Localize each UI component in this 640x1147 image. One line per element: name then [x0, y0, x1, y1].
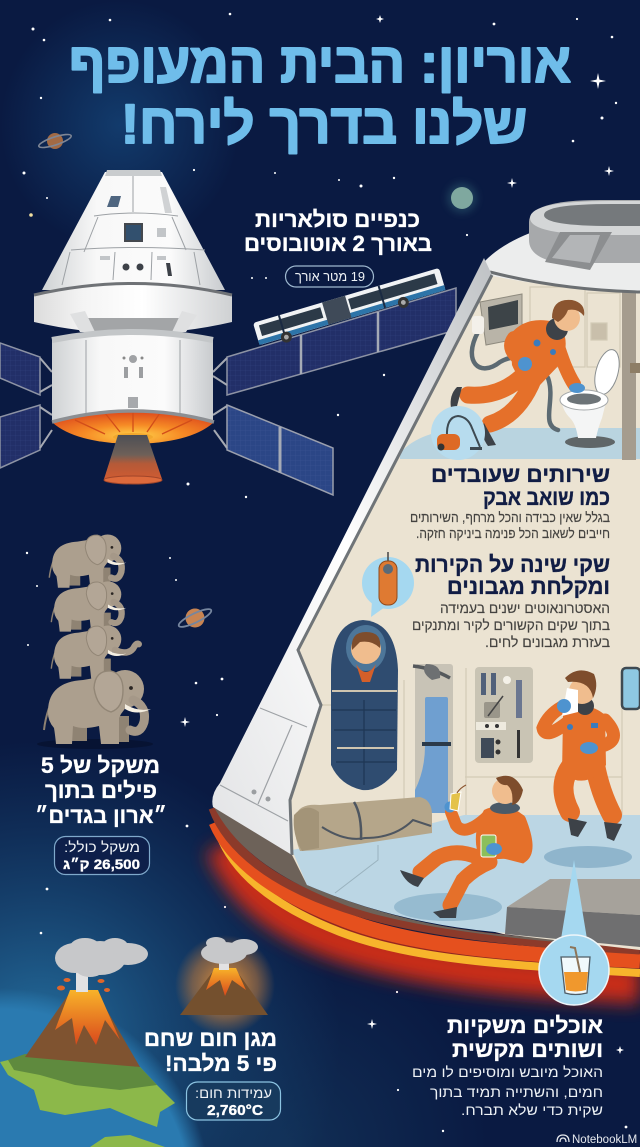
volcano: erupting on earth — [25, 938, 148, 1067]
toilet body text — [410, 510, 610, 541]
rolled cargo bag — [294, 797, 432, 851]
planet: ringed brown — [38, 132, 72, 150]
toilet heading: שירותים שעובדים — [431, 462, 610, 487]
sleeping body text — [412, 600, 610, 650]
juice cup — [450, 792, 461, 811]
drink body text: האוכל מיובש ומוסיפים לו מים — [412, 1064, 603, 1080]
drink heading: אוכלים משקיות — [447, 1013, 603, 1038]
astronaut drinking — [394, 776, 527, 921]
heat shield heading: פי 5 מלבה! — [165, 1051, 277, 1076]
planet: green — [447, 183, 477, 213]
toilet body text: בגלל שאין כבידה והכל מרחף, השירותים — [410, 510, 610, 525]
arms — [543, 707, 614, 748]
pill: total weight: משקל כולל: — [64, 839, 140, 855]
title: אוריון: הבית המעופף — [69, 31, 571, 94]
head — [576, 697, 594, 715]
legs — [420, 853, 490, 905]
torso — [562, 706, 606, 781]
torso — [510, 320, 566, 385]
right upper wing — [227, 288, 456, 395]
legs — [563, 765, 612, 815]
solar wings heading: כנפיים סולאריות — [255, 207, 420, 232]
sleeping heading — [415, 552, 610, 599]
third elephant, trunk raised — [51, 625, 139, 679]
sleeping body text: בתוך שקים הקשורים לקיר ומתנקים — [412, 617, 610, 633]
arms — [511, 338, 574, 384]
collar and head — [490, 802, 520, 814]
toilet body text: חייבים לשאוב הכל פנימה ביניקה חזקה. — [416, 526, 610, 541]
docking ring — [529, 200, 640, 270]
sleeping heading: שקי שינה על הקירות — [415, 552, 610, 577]
second elephant — [51, 581, 126, 632]
nozzle — [113, 433, 153, 441]
smoke cloud — [55, 938, 148, 992]
bus on solar wing — [253, 268, 447, 350]
astronaut with vacuum hose at toilet — [451, 294, 624, 448]
window — [622, 668, 640, 709]
right lower wing — [227, 405, 333, 495]
upper room walls — [310, 287, 622, 820]
icon bubble: hanging sleeping bag — [362, 552, 414, 617]
head — [546, 300, 584, 340]
pill: 19 m length: 19 מטר אורך — [295, 269, 365, 284]
solar wings heading: באורך 2 אוטובוסים — [244, 231, 432, 256]
top elephant — [49, 534, 126, 588]
pill: heat resistance — [186, 1082, 280, 1120]
wall — [290, 275, 640, 950]
boots — [451, 387, 462, 410]
gloves — [518, 357, 532, 371]
sleeping body text: האסטרונאוטים ישנים בעמידה — [440, 600, 610, 616]
heat shield heading — [144, 1026, 277, 1076]
title: שלנו בדרך לירח! — [121, 92, 527, 155]
arms — [451, 812, 527, 857]
drink body text: שקית כדי שלא תברח. — [461, 1102, 603, 1118]
support column — [622, 290, 640, 460]
engine flame base — [53, 410, 213, 444]
Orion cutaway interior — [212, 200, 640, 985]
heat shield layers — [213, 805, 640, 973]
left wings — [0, 343, 40, 468]
drink body text — [412, 1064, 603, 1118]
pill: total weight — [54, 836, 150, 874]
toilet heading: כמו שואב אבק — [483, 485, 610, 510]
pill: heat resistance: 2,760°C — [207, 1103, 264, 1119]
drink heading — [447, 1013, 603, 1062]
grey platform — [505, 879, 640, 947]
boots — [568, 818, 587, 837]
lower floor — [292, 815, 640, 933]
sleeping body text: בעזרת מגבונים לחים. — [485, 634, 610, 650]
pouch — [481, 835, 496, 857]
Orion capsule exterior — [34, 170, 232, 484]
pill: total weight: 26,500 ק״ג — [63, 856, 140, 872]
earth with land — [0, 985, 215, 1147]
legs — [468, 368, 535, 424]
drink heading: ושותים מקשית — [452, 1037, 603, 1062]
torso — [476, 806, 527, 860]
sleeping astronaut in bag — [331, 620, 398, 790]
control panel — [475, 667, 533, 763]
tissue and glove — [562, 688, 578, 716]
service module body — [52, 331, 213, 422]
astronaut wiping face — [543, 670, 632, 868]
weight heading: ״ארון בגדים״ — [35, 803, 167, 828]
heat shield glow — [224, 845, 640, 985]
oxygen tank in alcove — [413, 664, 453, 813]
callout: juice pouch — [539, 860, 609, 1005]
weight heading: פילים בתוך — [45, 778, 157, 803]
sleeping heading: ומקלחת מגבונים — [447, 574, 610, 599]
bottom elephant — [44, 670, 151, 744]
NotebookLM logo: NotebookLM — [572, 1134, 637, 1146]
solar wings — [0, 288, 456, 495]
pill: 19 m length — [286, 266, 374, 287]
weight heading: משקל של 5 — [41, 753, 160, 778]
hose — [472, 332, 558, 430]
solar wings heading — [244, 207, 432, 256]
heat shield heading: מגן חום שחם — [144, 1026, 277, 1051]
icon bubble: vacuum cleaner — [431, 406, 485, 460]
wing struts — [40, 358, 227, 448]
title — [69, 31, 571, 155]
toilet heading — [431, 462, 610, 510]
toilet — [560, 347, 624, 448]
volcano: heat glow — [175, 935, 275, 1035]
cone — [42, 172, 225, 290]
weight heading — [35, 753, 167, 828]
boots — [400, 870, 424, 887]
planet: ringed orange — [177, 606, 213, 630]
service ring — [34, 284, 232, 334]
elephant stack — [37, 534, 153, 749]
upper deck — [400, 428, 640, 459]
hull metal strip — [212, 258, 492, 855]
pill: heat resistance: עמידות חום: — [195, 1085, 272, 1101]
wall monitor — [480, 294, 522, 345]
roof — [484, 233, 640, 292]
drink body text: חמים, והשתייה תמיד בתוך — [430, 1084, 603, 1100]
